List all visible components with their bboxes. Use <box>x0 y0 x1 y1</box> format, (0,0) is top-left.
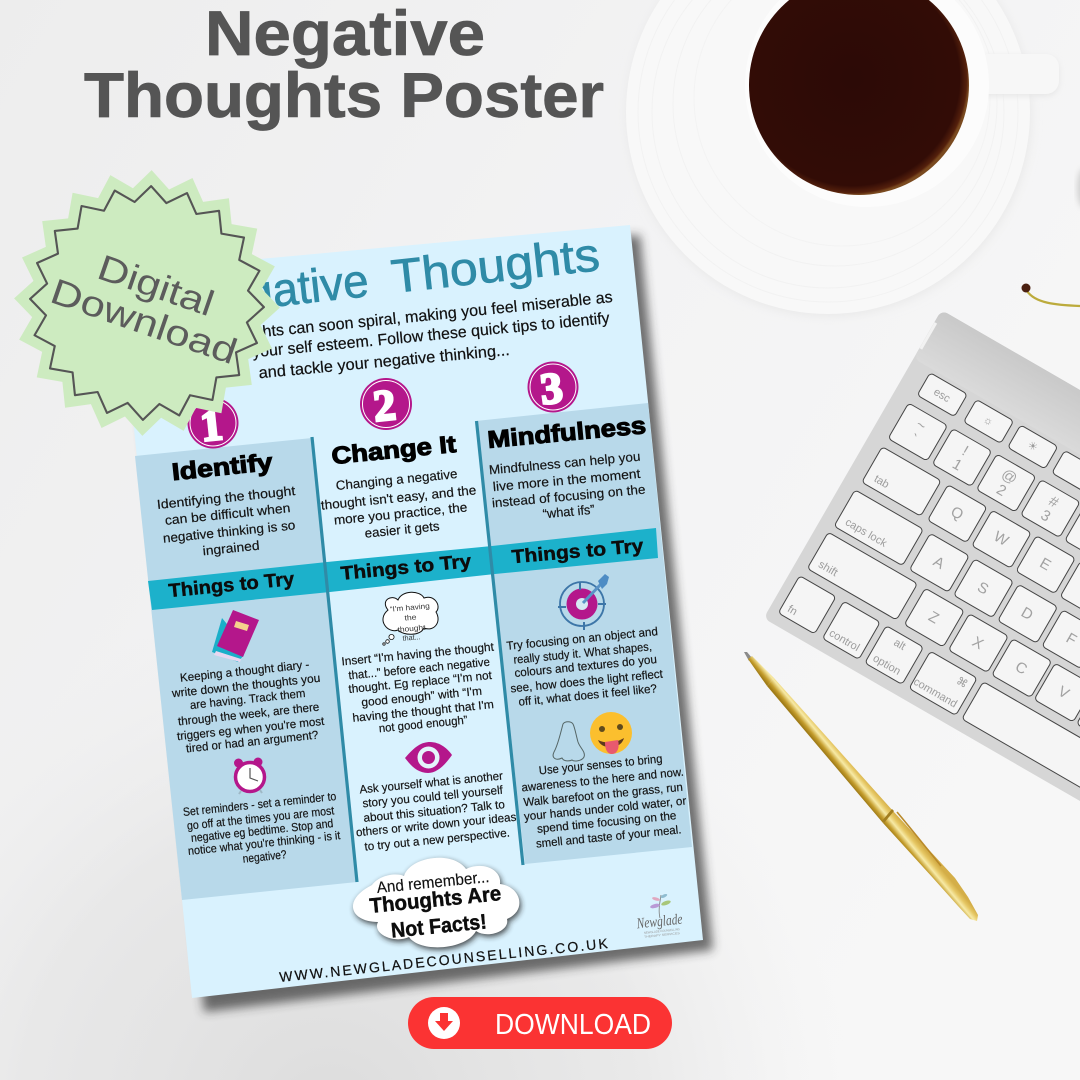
number row keys: ~ <box>913 416 929 435</box>
senses text: smell and taste of your meal. <box>535 822 682 851</box>
description: Mindfulness can help you <box>488 449 641 477</box>
icon: alarm clock <box>234 758 264 794</box>
panel: column 3 background <box>476 403 692 864</box>
badge text: Digital Download: Download <box>46 270 242 372</box>
icon: eye <box>405 742 452 773</box>
QWERTY row keys: tab <box>872 473 891 491</box>
column dividers <box>312 421 523 882</box>
number row keys: # <box>1046 493 1062 512</box>
Newglade logo: THERAPY SERVICES <box>644 931 680 939</box>
heading: Identify: Identify <box>171 449 275 486</box>
reminders text: go off at the times you are most <box>186 803 336 833</box>
another story text: story you could tell yourself <box>362 783 504 810</box>
heading: Change It: Change It <box>330 431 457 470</box>
function row keys <box>917 373 1080 494</box>
shift row keys: shift <box>816 559 840 579</box>
number row keys: ! <box>959 443 971 460</box>
another story text <box>355 769 517 854</box>
poster intro text: and tackle your negative thinking... <box>258 342 510 382</box>
bottom row keys: control <box>827 627 861 654</box>
shift row keys: V <box>1055 683 1072 703</box>
home row keys: D <box>1018 604 1036 624</box>
icon: thought bubble: the <box>404 613 417 623</box>
icon: notebooks <box>212 610 259 662</box>
focusing text: Try focusing on an object and <box>506 624 658 653</box>
description: Identifying the thought <box>156 483 296 512</box>
icon: thought bubble: thought <box>397 623 427 634</box>
description: live more in the moment <box>492 466 641 494</box>
another story text: to try out a new perspective. <box>364 825 510 854</box>
icon: download arrow <box>428 1007 460 1039</box>
shift row keys: C <box>1012 658 1030 678</box>
insert phrase text: good enough” with “I'm <box>361 684 483 709</box>
poster heading: Negative Thoughts: Negative <box>186 253 371 326</box>
poster sheet <box>118 225 703 998</box>
function row keys: ☀ <box>1025 439 1040 454</box>
number badge 1: 1 <box>198 400 225 451</box>
focusing text: off it, what does it feel like? <box>518 681 658 709</box>
senses text <box>521 752 687 851</box>
thought diary text: triggers eg when you're most <box>176 714 326 743</box>
reminders text: negative eg bedtime. Stop and <box>190 816 334 845</box>
focusing text: see, how does the light reflect <box>510 667 664 695</box>
icon: thought bubble: “I'm having <box>389 601 430 614</box>
number row keys: 2 <box>993 481 1009 500</box>
thought diary text: tired or had an argument? <box>185 728 319 755</box>
reminders text: Set reminders - set a reminder to <box>182 789 337 819</box>
badge text: Digital Download: Digital <box>93 246 219 324</box>
poster intro text <box>154 289 613 382</box>
shift row keys <box>807 532 1080 747</box>
bottom row keys: ⌘ <box>954 675 969 691</box>
icon: thought bubble: that... <box>402 632 421 643</box>
Newglade logo: NEWGLADE COUNSELLING <box>644 927 681 935</box>
number badge 2: 2 <box>371 380 398 431</box>
number badge 3: 3 <box>538 363 565 414</box>
panel: column 1 background <box>135 438 357 900</box>
bottom row keys: command <box>911 676 959 710</box>
cherry stem <box>1022 284 1080 306</box>
description: more you practice, the <box>333 499 468 528</box>
bottom row keys: fn <box>785 603 799 618</box>
focusing text: really study it. What shapes, <box>513 639 652 667</box>
description: Changing a negative <box>335 466 458 493</box>
subheading: Things to Try: Things to Try <box>340 551 473 585</box>
gold pen <box>744 652 978 921</box>
number row keys <box>888 403 1080 563</box>
home row keys <box>834 490 1080 694</box>
description: negative thinking is so <box>162 517 296 546</box>
bottom row keys <box>778 576 1080 849</box>
poster heading: Negative Thoughts: Thoughts <box>389 227 602 303</box>
number badge 1 <box>188 398 238 451</box>
insert phrase text: thought. Eg replace “I'm not <box>348 668 493 696</box>
description <box>156 483 296 558</box>
QWERTY row keys: W <box>991 528 1012 550</box>
callout cloud: Thoughts Are Not Facts: Not Facts! <box>390 910 488 943</box>
senses text: Walk barefoot on the grass, run <box>523 780 683 809</box>
subheading: Things to Try: Things to Try <box>168 569 296 602</box>
object at right edge <box>1077 168 1080 208</box>
digital download starburst badge <box>9 165 285 441</box>
keyboard <box>764 310 1080 968</box>
bottom row keys: option <box>871 652 903 678</box>
icon: thought bubble <box>383 592 438 645</box>
download button <box>408 997 672 1049</box>
function row keys: ☼ <box>981 414 996 429</box>
another story text: Ask yourself what is another <box>359 769 504 797</box>
function row keys: esc <box>931 386 953 405</box>
QWERTY row keys: E <box>1037 555 1054 574</box>
icon: nose <box>553 722 584 761</box>
icon: target <box>558 574 609 630</box>
callout cloud: Thoughts Are Not Facts <box>353 858 521 950</box>
description: “what ifs” <box>542 502 595 521</box>
reminders text: negative? <box>242 847 288 866</box>
shift row keys: Z <box>925 608 942 627</box>
another story text: about this situation? Talk to <box>363 797 506 825</box>
number badge 2 <box>360 378 412 431</box>
icon: tongue-out emoji <box>590 712 632 754</box>
home row keys: caps lock <box>843 516 889 550</box>
description: easier it gets <box>364 518 441 541</box>
badge text: Digital Download <box>46 246 242 372</box>
thought diary text: Keeping a thought diary - <box>179 657 310 685</box>
poster heading: Negative Thoughts <box>186 227 602 326</box>
description <box>488 449 646 521</box>
title: Thoughts Poster <box>84 61 604 131</box>
thought diary text: through the week, are there <box>177 700 320 728</box>
reminders text <box>182 789 342 866</box>
number row keys: ` <box>907 431 919 448</box>
column 3: Mindfulness <box>486 412 687 851</box>
description: ingrained <box>202 538 260 558</box>
Newglade logo: Newglade <box>635 912 684 932</box>
description: instead of focusing on the <box>491 482 646 510</box>
website URL: WWW.NEWGLADECOUNSELLING.CO.UK <box>279 935 609 985</box>
title <box>84 0 604 131</box>
another story text: others or write down your ideas <box>355 810 517 839</box>
insert phrase text: having the thought that I'm <box>352 697 495 725</box>
thought diary text: are having. Track them <box>189 686 306 712</box>
home row keys: S <box>974 579 991 598</box>
Newglade logo <box>635 893 684 939</box>
shift row keys: X <box>969 633 986 653</box>
home row keys: F <box>1063 630 1079 649</box>
poster shadow <box>128 235 713 1012</box>
number badge 3 <box>528 362 578 414</box>
focusing text <box>506 624 664 709</box>
senses text: Use your senses to bring <box>538 752 663 778</box>
reminders text: notice what you're thinking - is it <box>187 828 342 858</box>
column 1: Identify <box>156 449 342 866</box>
bottom row keys: alt <box>891 637 908 653</box>
insert phrase text: that...” before each negative <box>348 655 491 682</box>
title: Negative <box>205 0 485 69</box>
callout cloud: Thoughts Are Not Facts: Thoughts Are <box>369 882 502 918</box>
description: can be difficult when <box>164 500 291 528</box>
insert phrase text <box>341 640 495 735</box>
number row keys: 3 <box>1038 507 1053 525</box>
description <box>320 466 477 541</box>
thought diary text: write down the thoughts you <box>170 671 321 700</box>
senses text: your hands under cold water, or <box>523 794 687 823</box>
description: thought isn't easy, and the <box>320 482 477 513</box>
QWERTY row keys <box>862 447 1080 619</box>
senses text: spend time focusing on the <box>536 808 677 836</box>
download button: DOWNLOAD <box>495 1009 651 1041</box>
things to try band <box>148 528 658 610</box>
insert phrase text: Insert “I'm having the thought <box>341 640 495 668</box>
home row keys: A <box>930 553 947 573</box>
QWERTY row keys: Q <box>948 503 966 524</box>
number row keys: 1 <box>949 456 965 474</box>
focusing text: colours and textures do you <box>514 652 657 680</box>
callout cloud: Thoughts Are Not Facts: And remember... <box>376 869 490 897</box>
subheading: Things to Try: Things to Try <box>511 536 645 568</box>
insert phrase text: not good enough” <box>378 713 468 735</box>
poster intro text: Negative thoughts can soon spiral, making you feel miserable as <box>154 289 613 352</box>
heading: Mindfulness: Mindfulness <box>486 412 647 454</box>
thought diary text <box>170 657 326 755</box>
senses text: awareness to the here and now. <box>521 765 684 794</box>
number row keys: @ <box>998 466 1020 488</box>
poster intro text: and damage your self esteem. Follow these quick tips to identify <box>159 310 610 370</box>
column 2: Change It <box>320 431 517 854</box>
coffee cup on saucer <box>626 0 1059 316</box>
